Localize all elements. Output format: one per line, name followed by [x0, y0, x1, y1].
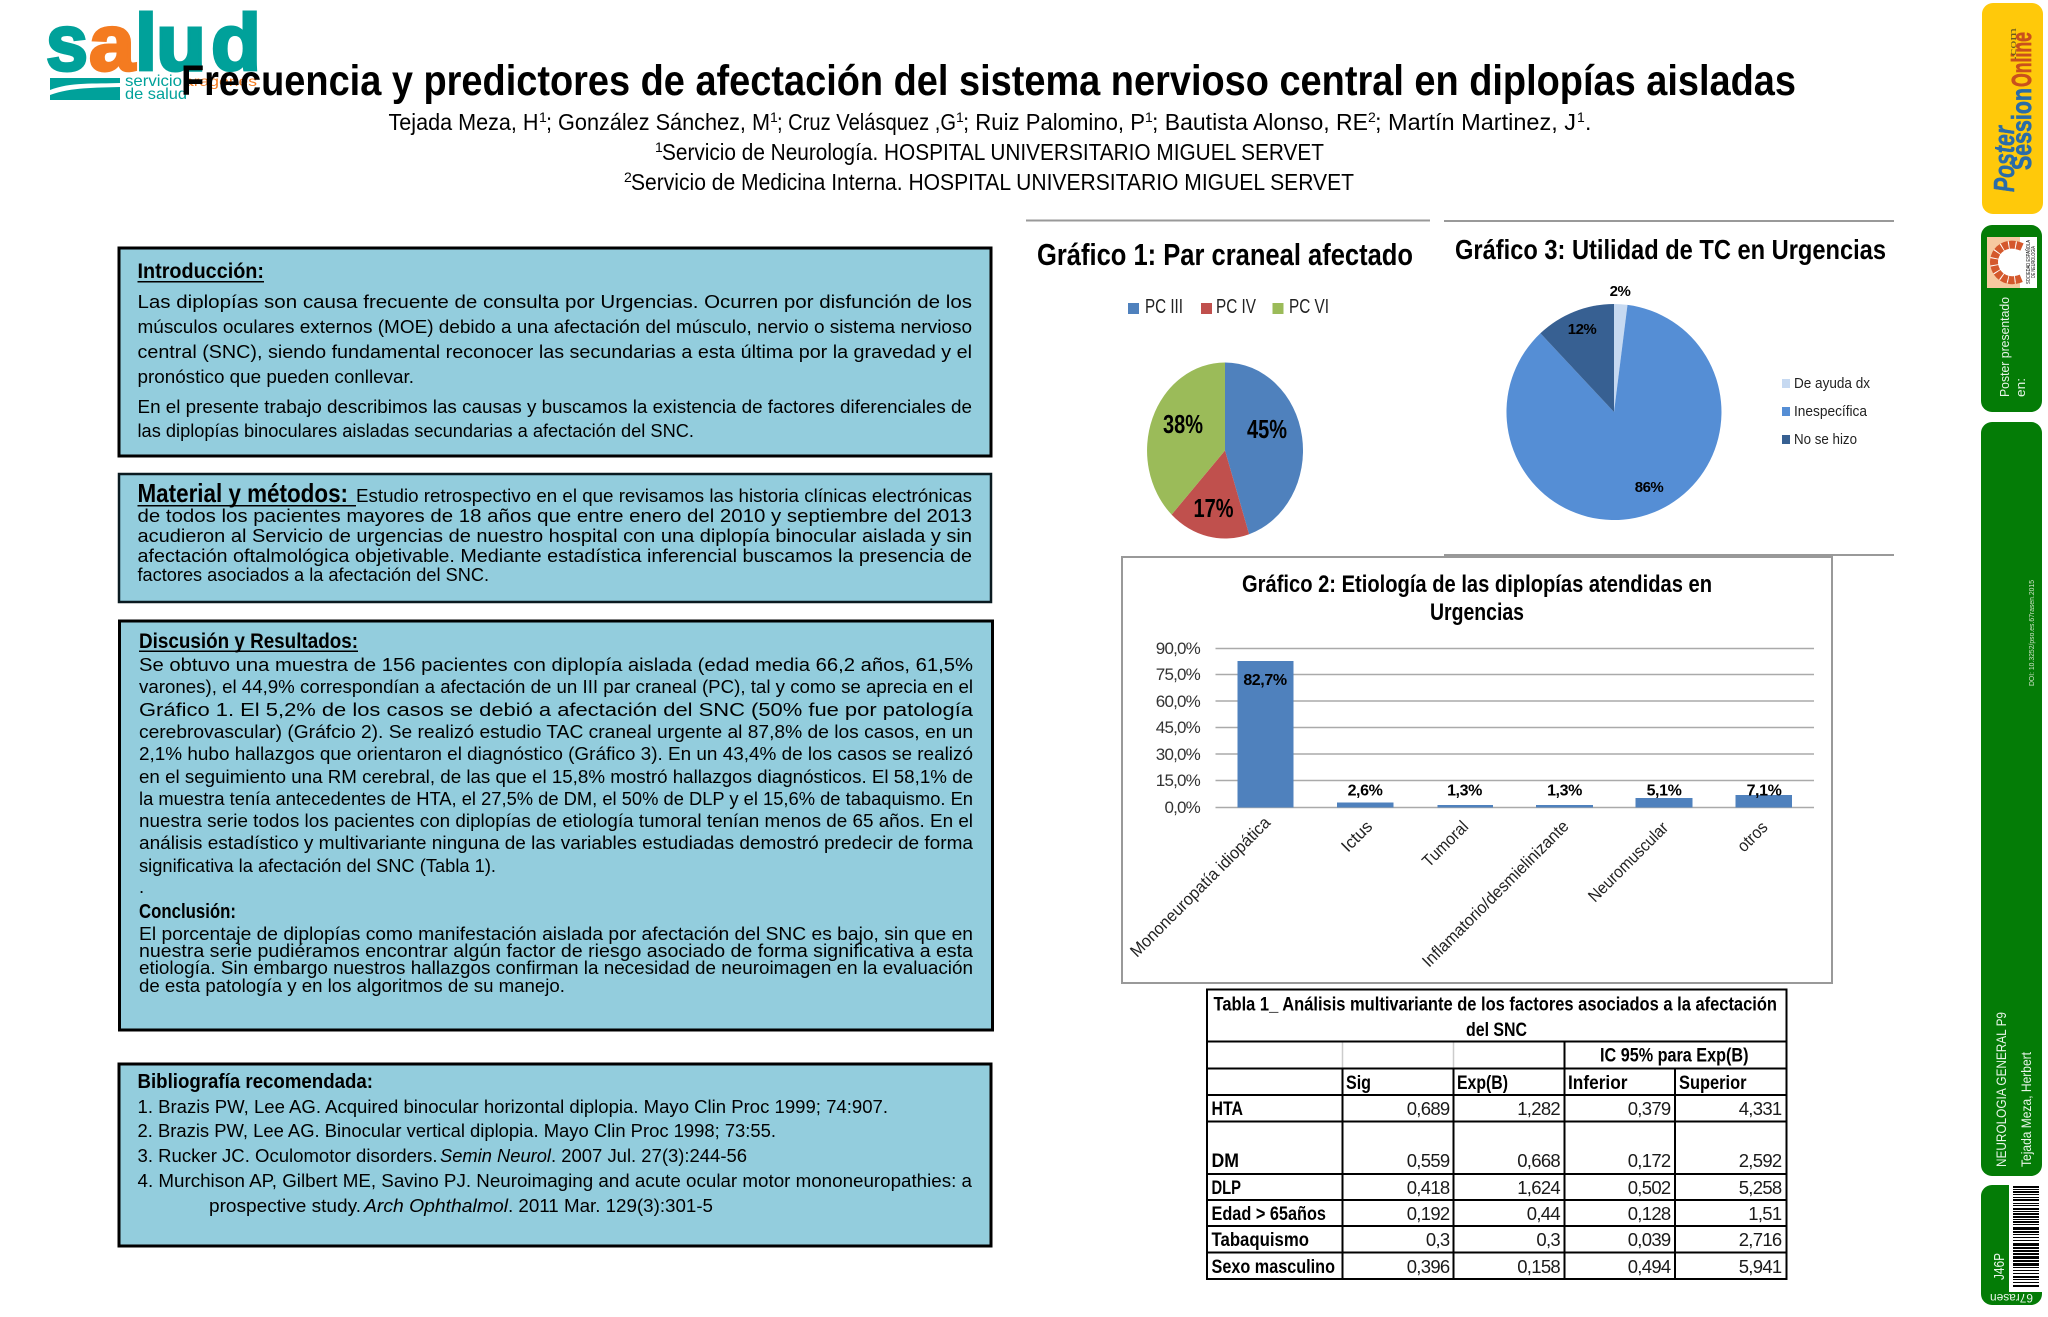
table row: edad — [1212, 1203, 1782, 1225]
axis: valores — [1156, 639, 1201, 817]
logo: salud servicio aragonés de salud: servicio — [125, 73, 182, 90]
pie: gráfico 1 — [1147, 362, 1303, 538]
sidebar: poster session online: .com — [2007, 27, 2019, 60]
axis: categorías — [1126, 813, 1772, 971]
authors: Tejada Meza, H — [388, 109, 538, 135]
bar values — [1243, 672, 1782, 800]
table row: HTA — [1212, 1098, 1782, 1120]
table title: del SNC — [1466, 1020, 1527, 1041]
pie: gráfico 1: 45% — [1247, 414, 1287, 444]
text: discusión y resultados body: . — [139, 876, 144, 897]
chart: gráfico 3 utilidad de TC en urgencias — [1444, 220, 1894, 556]
authors: 1 — [1577, 109, 1585, 125]
sidebar: código J46P — [1981, 1185, 2042, 1305]
table row: sexo masculino — [1212, 1256, 1782, 1278]
table column headers: Sig — [1346, 1073, 1371, 1094]
bar values: 82,7% — [1243, 672, 1287, 689]
table row: HTA: HTA — [1212, 1099, 1243, 1120]
table row: DM: DM — [1212, 1151, 1239, 1172]
logo: salud servicio aragonés de salud: l — [135, 0, 157, 87]
bar values: 1,3% — [1447, 782, 1482, 800]
authors: ; Ruiz Palomino, P — [963, 109, 1145, 135]
sidebar: poster session online: Online — [2006, 32, 2037, 87]
pie: gráfico 1: 38% — [1163, 409, 1203, 439]
text: poster presentado — [1997, 297, 2028, 397]
affiliation 2: Servicio de Medicina Interna. HOSPITAL UNIVERSITARIO MIGUEL SERVET — [631, 169, 1354, 195]
axis: valores: 15,0% — [1156, 771, 1201, 790]
table row: DLP: 5,258 — [1739, 1177, 1782, 1198]
axis: valores: 30,0% — [1156, 745, 1201, 764]
table row: tabaquismo: 0,3 — [1536, 1229, 1560, 1250]
axis: categorías: Inflamatorio/desmielinizante — [1418, 817, 1573, 971]
logo: salud servicio aragonés de salud: de salud — [125, 86, 187, 103]
icon: barcode — [2013, 1186, 2039, 1287]
chart: gráfico 2 etiología — [1122, 557, 1832, 983]
legend: gráfico 3: Inespecífica — [1794, 403, 1868, 420]
table row: tabaquismo: 0,039 — [1628, 1229, 1671, 1250]
table column headers — [1346, 1046, 1748, 1094]
table row: sexo masculino: 0,158 — [1517, 1256, 1560, 1277]
axis: valores: 90,0% — [1156, 639, 1201, 658]
table row: tabaquismo: 2,716 — [1739, 1229, 1782, 1250]
table row: DM: 2,592 — [1739, 1150, 1782, 1171]
text: discusión y resultados body: varones), el 44,9% correspondían a afectación de un III par craneal (PC), tal y como se aprecia en el — [139, 676, 973, 697]
table title — [1214, 994, 1777, 1041]
pie: gráfico 3: 2% — [1610, 283, 1630, 300]
affiliation 1: 1 — [655, 139, 663, 155]
logo: salud servicio aragonés de salud — [46, 0, 261, 103]
text: poster presentado: Poster presentado — [1997, 297, 2012, 397]
logo: salud servicio aragonés de salud: a — [89, 0, 136, 87]
text: discusión y resultados body: cerebrovascular) (Gráfcio 2). Se realizó estudio TAC craneal urgente al 87,8% de los casos, en un — [139, 721, 973, 742]
table row: sexo masculino: 5,941 — [1739, 1256, 1782, 1277]
icon: sociedad de neurología: DE NEUROLOGÍA — [2030, 245, 2037, 278]
text: discusión y resultados body: análisis estadístico y multivariante ninguna de las variables estudiadas demostró predecir de forma — [139, 832, 974, 853]
panel: bibliografía — [119, 1064, 991, 1246]
text: referencias: 2. Brazis PW, Lee AG. Binocular vertical diplopia. Mayo Clin Proc 1998; 73:55. — [138, 1120, 776, 1141]
heading: material y métodos: Material y métodos: — [138, 478, 348, 508]
sidebar: neurología general — [1981, 422, 2042, 1176]
text: referencias: 1. Brazis PW, Lee AG. Acquired binocular horizontal diplopia. Mayo Clin Proc 1999; 74:907. — [138, 1096, 888, 1117]
axis: categorías: Ictus — [1337, 817, 1376, 856]
icon: sociedad de neurología: SOCIEDAD ESPAÑOLA — [2025, 239, 2032, 284]
table column headers: Superior — [1679, 1073, 1747, 1094]
legend: gráfico 1: PC IV — [1216, 296, 1256, 318]
heading: gráfico 3: Gráfico 3: Utilidad de TC en Urgencias — [1455, 234, 1886, 265]
text: conclusión body — [139, 923, 974, 996]
table row: tabaquismo: Tabaquismo — [1212, 1230, 1309, 1251]
panel: introducción — [119, 248, 991, 456]
text: introducción body: las diplopías binoculares aisladas secundarias a afectación del SNC. — [138, 420, 694, 441]
axis: categorías: otros — [1733, 818, 1772, 856]
text: discusión y resultados body: 2,1% hubo hallazgos que orientaron el diagnóstico (Gráfico 3). En un 43,4% de los casos se realizó — [139, 743, 973, 764]
text: material y métodos body: acudieron al Servicio de urgencias de nuestro hospital con una diplopía binocular aislada y sin — [138, 525, 972, 546]
table row: DLP: 0,502 — [1628, 1177, 1671, 1198]
table row: sexo masculino: Sexo masculino — [1212, 1257, 1335, 1278]
chart: gráfico 1 par craneal afectado — [1026, 220, 1430, 538]
text: referencias: prospective study. — [209, 1195, 361, 1216]
text: introducción body: pronóstico que pueden conllevar. — [138, 366, 414, 387]
text: material y métodos body: factores asociados a la afectación del SNC. — [138, 564, 489, 585]
axis: valores: 60,0% — [1156, 692, 1201, 711]
authors: . — [1585, 109, 1591, 135]
text: DOI: DOI: 10.3252/pso.es.67rasen.2015 — [2029, 580, 2036, 686]
heading: bibliografía: Bibliografía recomendada: — [138, 1071, 373, 1093]
legend: gráfico 3 — [1782, 375, 1870, 448]
text: referencias: Semin Neurol — [440, 1145, 552, 1166]
legend: gráfico 1: PC VI — [1289, 296, 1329, 318]
text: sesión: NEUROLOGIA GENERAL P9 — [1993, 1012, 2009, 1167]
logo: salud servicio aragonés de salud: s — [46, 0, 88, 87]
bar values: 5,1% — [1647, 782, 1682, 800]
text: referencias: 3. Rucker JC. Oculomotor disorders. — [138, 1145, 438, 1166]
legend: gráfico 1: PC III — [1145, 296, 1183, 318]
sidebar: poster session online — [1982, 3, 2043, 214]
table row: edad: 0,192 — [1407, 1203, 1450, 1224]
authors: 1 — [956, 109, 964, 125]
text: material y métodos body: afectación oftalmológica objetivable. Mediante estadística inferencial buscamos la presencia de — [138, 545, 972, 566]
text: referencias: 4. Murchison AP, Gilbert ME, Savino PJ. Neuroimaging and acute ocular motor mononeuropathies: a — [138, 1170, 973, 1191]
table row: HTA: 4,331 — [1739, 1098, 1782, 1119]
table row: DLP: 1,624 — [1517, 1177, 1560, 1198]
panel: material y métodos — [119, 474, 991, 602]
table row: sexo masculino: 0,494 — [1628, 1256, 1671, 1277]
table column headers: Inferior — [1568, 1073, 1628, 1094]
table row: sexo masculino: 0,396 — [1407, 1256, 1450, 1277]
text: discusión y resultados body: significativa la afectación del SNC (Tabla 1). — [139, 855, 496, 876]
text: referencias — [138, 1096, 973, 1216]
legend: gráfico 3: De ayuda dx — [1794, 375, 1870, 392]
pie: gráfico 3 — [1506, 283, 1721, 520]
text: conclusión body: de esta patología y en los algoritmos de su manejo. — [139, 975, 565, 996]
table row: HTA: 0,379 — [1628, 1098, 1671, 1119]
text: conclusión body: nuestra serie pudiéramos encontrar algún factor de riesgo asociado de forma significativa a esta — [139, 940, 974, 961]
pie: gráfico 3: 86% — [1635, 479, 1663, 496]
text: discusión y resultados body: la muestra tenía antecedentes de HTA, el 27,5% de DM, el 50% de DLP y el 15,6% de tabaquismo. En — [139, 788, 973, 809]
authors: 1 — [770, 109, 778, 125]
legend: gráfico 3: No se hizo — [1794, 431, 1857, 448]
bars — [1238, 661, 1792, 808]
logo: salud servicio aragonés de salud: d — [211, 0, 261, 87]
axis: valores: 75,0% — [1156, 665, 1201, 684]
text: introducción body — [138, 291, 972, 441]
sidebar: poster presentado en — [1981, 225, 2042, 412]
affiliation 2: 2 — [624, 169, 632, 185]
text: referencias: Arch Ophthalmol — [363, 1195, 509, 1216]
text: conclusión body: El porcentaje de diplopías como manifestación aislada por afectación del SNC es bajo, sin que en — [139, 923, 973, 944]
text: discusión y resultados body — [139, 654, 974, 897]
sidebar: poster session online: Poster — [1989, 125, 2021, 192]
table row: DLP: 0,418 — [1407, 1177, 1450, 1198]
axis: valores: 45,0% — [1156, 718, 1201, 737]
heading: discusión y resultados: Discusión y Resultados: — [139, 630, 358, 653]
text: referencias: . 2011 Mar. 129(3):301-5 — [508, 1195, 713, 1216]
table row: DM — [1212, 1150, 1782, 1172]
authors: 1 — [539, 109, 547, 125]
bar values: 2,6% — [1348, 782, 1383, 800]
sidebar: poster session online: Session — [2006, 88, 2037, 170]
text: material y métodos body: Estudio retrospectivo en el que revisamos las historia clínicas electrónicas — [356, 485, 972, 506]
text: conclusión body: etiología. Sin embargo nuestros hallazgos confirman la necesidad de neuroimagen en la evaluación — [139, 957, 973, 978]
heading: gráfico 2: Urgencias — [1430, 599, 1524, 626]
table row: HTA: 1,282 — [1517, 1098, 1560, 1119]
table row: edad: 1,51 — [1748, 1203, 1782, 1224]
logo: salud servicio aragonés de salud: aragonés — [184, 73, 257, 89]
text: poster presentado: en: — [2013, 378, 2028, 397]
title: Frecuencia y predictores de afectación del sistema nervioso central en diplopías aisladas — [181, 57, 1796, 105]
table column headers: IC 95% para Exp(B) — [1600, 1046, 1748, 1066]
text: introducción body: Las diplopías son causa frecuente de consulta por Urgencias. Ocurren por disfunción de los — [138, 291, 972, 312]
table row: HTA: 0,689 — [1407, 1098, 1450, 1119]
table row: DLP: DLP — [1212, 1178, 1241, 1199]
table: análisis multivariante — [1207, 990, 1786, 1279]
text: introducción body: En el presente trabajo describimos las causas y buscamos la existencia de factores diferenciales de — [138, 396, 972, 417]
text: autor: Tejada Meza, Herbert — [2018, 1052, 2034, 1167]
text: discusión y resultados body: en el seguimiento una RM cerebral, de las que el 15,8% mostró hallazgos diagnósticos. El 58,1% de — [139, 766, 973, 787]
text: discusión y resultados body: Se obtuvo una muestra de 156 pacientes con diplopía aislada (edad media 66,2 años, 61,5% — [139, 654, 973, 675]
text: discusión y resultados body: Gráfico 1. El 5,2% de los casos se debió a afectación del SNC (50% fue por patología — [139, 699, 974, 720]
authors: ; Cruz Velásquez ,G — [777, 109, 956, 135]
bar values: 1,3% — [1547, 782, 1582, 800]
table row: edad: 0,128 — [1628, 1203, 1671, 1224]
table row: edad: Edad > 65años — [1212, 1204, 1326, 1225]
table row: DLP — [1212, 1177, 1782, 1199]
axis: categorías: Neuromuscular — [1584, 818, 1672, 906]
table row: DM: 0,668 — [1517, 1150, 1560, 1171]
bar values: 7,1% — [1747, 782, 1782, 800]
affiliation 1: Servicio de Neurología. HOSPITAL UNIVERSITARIO MIGUEL SERVET — [662, 139, 1324, 165]
text: introducción body: músculos oculares externos (MOE) debido a una afectación del músculo, nervio o sistema nervioso — [138, 316, 972, 337]
panel: discusión, resultados y conclusión — [120, 621, 992, 1030]
heading: introducción: Introducción: — [138, 260, 264, 283]
table row: DM: 0,559 — [1407, 1150, 1450, 1171]
authors: ; González Sánchez, M — [546, 109, 770, 135]
text: discusión y resultados body: nuestra serie todos los pacientes con diplopías de etiología tumoral tenían menos de 65 años. En el — [139, 810, 973, 831]
authors — [388, 109, 1591, 135]
text: material y métodos body — [138, 485, 972, 585]
authors: 1 — [1145, 109, 1153, 125]
axis: valores: 0,0% — [1164, 798, 1201, 817]
heading: gráfico 2: Gráfico 2: Etiología de las diplopías atendidas en — [1242, 571, 1712, 598]
axis: categorías: Mononeuropatía idiopática — [1126, 813, 1275, 961]
table row: tabaquismo: 0,3 — [1426, 1229, 1450, 1250]
text: referencias: . 2007 Jul. 27(3):244-56 — [551, 1145, 747, 1166]
pie: gráfico 3: 12% — [1568, 321, 1596, 338]
table title: Tabla 1_ Análisis multivariante de los factores asociados a la afectación — [1214, 994, 1777, 1016]
legend: gráfico 1 — [1128, 296, 1329, 318]
authors: ; Bautista Alonso, RE — [1152, 109, 1368, 135]
table row: edad: 0,44 — [1527, 1203, 1560, 1224]
authors: ; Martín Martinez, J — [1375, 109, 1576, 135]
text: 67rasen: 67rasen — [1990, 1291, 2033, 1305]
heading: conclusión: Conclusión: — [139, 901, 236, 923]
table column headers: Exp(B) — [1457, 1073, 1508, 1094]
pie: gráfico 1: 17% — [1194, 493, 1234, 523]
axis: categorías: Tumoral — [1418, 817, 1472, 871]
text: material y métodos body: de todos los pacientes mayores de 18 años que entre enero del 2010 y septiembre del 2013 — [138, 505, 972, 526]
logo: salud servicio aragonés de salud: u — [156, 0, 206, 87]
authors: 2 — [1368, 109, 1376, 125]
text: J46P: J46P — [1991, 1253, 2008, 1280]
heading: gráfico 2 — [1242, 571, 1712, 626]
heading: gráfico 1: Gráfico 1: Par craneal afectado — [1037, 237, 1413, 272]
table row: DM: 0,172 — [1628, 1150, 1671, 1171]
table row: tabaquismo — [1212, 1229, 1782, 1251]
icon: sociedad de neurología — [1987, 237, 2037, 288]
text: introducción body: central (SNC), siendo fundamental reconocer las secundarias a esta última por la gravedad y el — [138, 341, 972, 362]
